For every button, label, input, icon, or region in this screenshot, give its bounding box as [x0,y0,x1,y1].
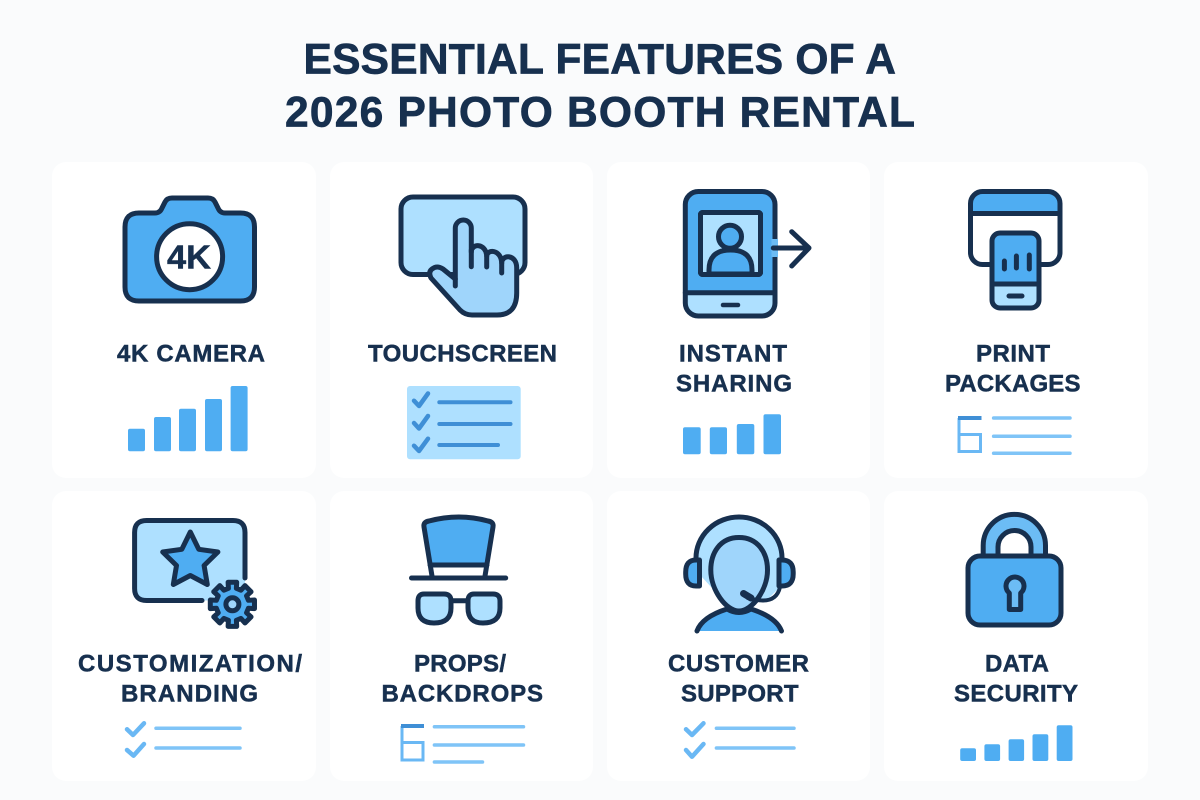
panel: instant sharing [607,162,870,478]
label: print packages [945,341,1080,398]
icon: camera [125,198,254,301]
panel: print packages [884,162,1148,478]
title: 2026 PHOTO BOOTH RENTAL [285,90,915,137]
label: props and backdrops [382,651,543,708]
panel: props and backdrops [330,491,593,781]
icon: padlock [968,514,1061,625]
label: customer support [668,651,809,708]
label: touchscreen: TOUCHSCREEN [368,341,557,368]
icon: support agent with headset [686,517,793,631]
list glyph: print packages [958,418,1070,453]
label: instant sharing: SHARING [676,371,792,398]
label: customer support: CUSTOMER [668,651,809,678]
label: customization and branding [78,651,302,708]
bar chart: data security [960,725,1072,761]
panel: 4K camera [52,162,316,478]
checklist: touchscreen [407,386,521,459]
label: customization and branding: BRANDING [121,681,258,708]
icon: hand on touchscreen [401,197,525,315]
icon: phone sharing photo [685,192,809,316]
icon: star card with gear [135,520,254,626]
label: data security: SECURITY [954,681,1078,708]
checklist: customization and branding [127,723,240,756]
icon: printer and phone [970,192,1060,308]
panel: customer support [607,491,870,781]
panel: touchscreen [330,162,593,478]
title: ESSENTIAL FEATURES OF A [304,36,896,83]
bar chart: 4K camera [128,386,248,451]
icon: top hat and glasses [412,517,506,623]
icon: camera: 4K [167,238,211,275]
label: props and backdrops: BACKDROPS [382,681,543,708]
bar chart: instant sharing [683,414,781,454]
list glyph: props and backdrops [401,726,524,762]
panel: data security [884,491,1148,781]
label: data security: DATA [985,651,1049,678]
label: instant sharing: INSTANT [679,341,787,368]
label: 4K camera: 4K CAMERA [117,341,265,368]
panel: customization and branding [52,491,316,781]
label: customer support: SUPPORT [681,681,799,708]
label: print packages: PACKAGES [945,371,1080,398]
checklist: customer support [686,723,794,757]
label: instant sharing [676,341,792,398]
label: props and backdrops: PROPS/ [414,651,506,678]
label: data security [954,651,1078,708]
title [285,36,915,137]
label: customization and branding: CUSTOMIZATION/ [78,651,302,678]
label: print packages: PRINT [976,341,1050,368]
